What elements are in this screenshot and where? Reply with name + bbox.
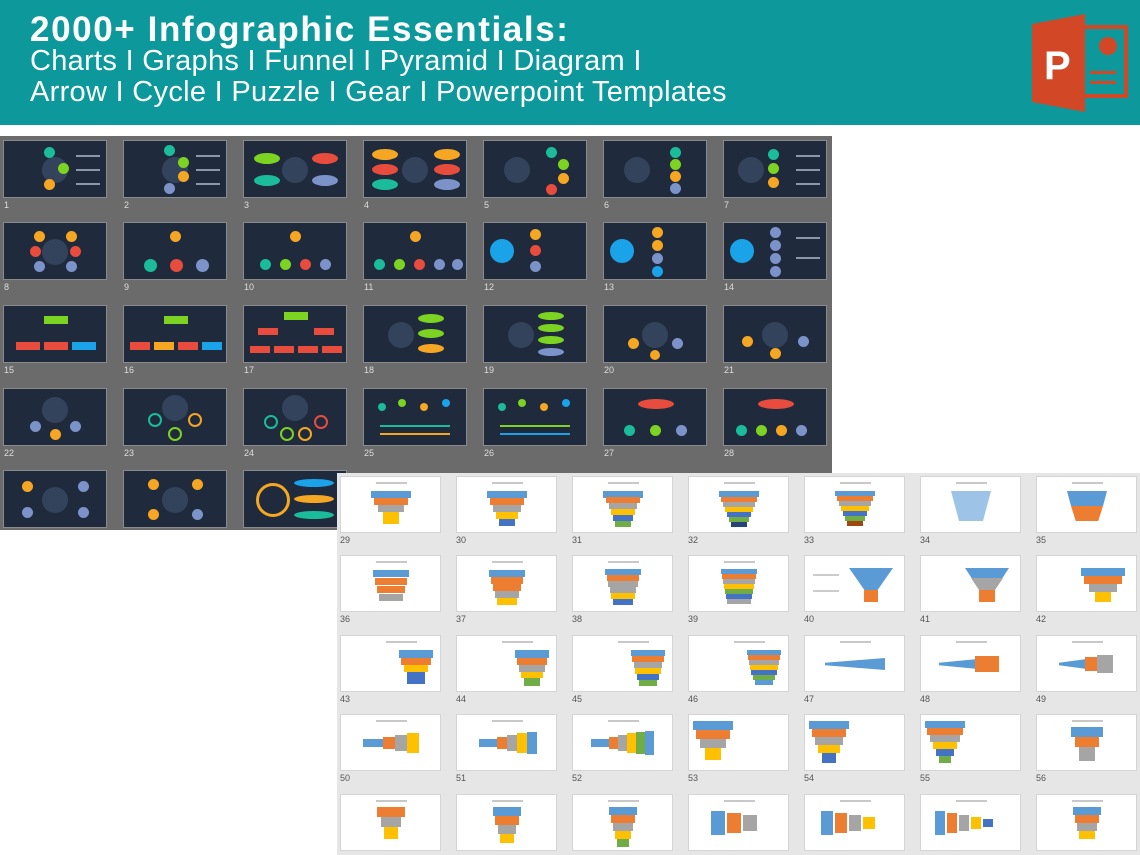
row 3 labels bbox=[4, 365, 734, 375]
panel: light funnel slide grid: 29 bbox=[340, 535, 350, 545]
light thumbnails row 3 bbox=[340, 635, 441, 692]
panel: dark slide grid: 3 bbox=[244, 200, 249, 210]
panel: dark slide grid: 14 bbox=[724, 282, 734, 292]
panel: dark slide grid: 27 bbox=[604, 448, 614, 458]
panel: light funnel slide grid: 54 bbox=[804, 773, 814, 783]
panel: light funnel slide grid: 52 bbox=[572, 773, 582, 783]
panel: light funnel slide grid: 43 bbox=[340, 694, 350, 704]
dark thumbnails row 3 bbox=[3, 305, 107, 363]
title: 2000+ Infographic Essentials: bbox=[30, 10, 570, 49]
row 4 labels bbox=[4, 448, 734, 458]
light thumbnails row 1 bbox=[340, 476, 441, 533]
panel: light funnel slide grid: 33 bbox=[804, 535, 814, 545]
panel: dark slide grid: 15 bbox=[4, 365, 14, 375]
panel: dark slide grid: 28 bbox=[724, 448, 734, 458]
panel: light funnel slide grid: 46 bbox=[688, 694, 698, 704]
icon: powerpoint: P bbox=[1044, 44, 1071, 88]
panel: light funnel slide grid: 50 bbox=[340, 773, 350, 783]
light thumbnails row 2 bbox=[340, 555, 441, 612]
panel: dark slide grid: 23 bbox=[124, 448, 134, 458]
row 1 labels bbox=[340, 535, 1046, 545]
dark thumbnails row 5 bbox=[3, 470, 107, 528]
panel: dark slide grid: 25 bbox=[364, 448, 374, 458]
panel: light funnel slide grid: 37 bbox=[456, 614, 466, 624]
panel: dark slide grid: 20 bbox=[604, 365, 614, 375]
panel: light funnel slide grid: 38 bbox=[572, 614, 582, 624]
panel: light funnel slide grid: 31 bbox=[572, 535, 582, 545]
panel: dark slide grid bbox=[0, 136, 832, 530]
panel: dark slide grid: 10 bbox=[244, 282, 254, 292]
panel: dark slide grid: 26 bbox=[484, 448, 494, 458]
panel: light funnel slide grid: 56 bbox=[1036, 773, 1046, 783]
panel: light funnel slide grid: 53 bbox=[688, 773, 698, 783]
panel: dark slide grid: 13 bbox=[604, 282, 614, 292]
light thumbnails row 4 bbox=[340, 714, 441, 771]
panel: light funnel slide grid: 49 bbox=[1036, 694, 1046, 704]
panel: dark slide grid: 24 bbox=[244, 448, 254, 458]
panel: light funnel slide grid: 55 bbox=[920, 773, 930, 783]
panel: light funnel slide grid: 42 bbox=[1036, 614, 1046, 624]
panel: light funnel slide grid: 41 bbox=[920, 614, 930, 624]
panel: dark slide grid: 8 bbox=[4, 282, 9, 292]
panel: dark slide grid: 5 bbox=[484, 200, 489, 210]
panel: light funnel slide grid bbox=[337, 473, 1140, 855]
panel: dark slide grid: 18 bbox=[364, 365, 374, 375]
panel: light funnel slide grid: 35 bbox=[1036, 535, 1046, 545]
panel: dark slide grid: 1 bbox=[4, 200, 9, 210]
row 2 labels bbox=[4, 282, 734, 292]
subtitle: Charts I Graphs I Funnel I Pyramid I Diagram I bbox=[30, 45, 642, 77]
row 2 labels bbox=[340, 614, 1046, 624]
panel: light funnel slide grid: 48 bbox=[920, 694, 930, 704]
panel: dark slide grid: 12 bbox=[484, 282, 494, 292]
row 1 labels bbox=[4, 200, 729, 210]
panel: light funnel slide grid: 36 bbox=[340, 614, 350, 624]
panel: dark slide grid: 6 bbox=[604, 200, 609, 210]
panel: dark slide grid: 16 bbox=[124, 365, 134, 375]
panel: light funnel slide grid: 51 bbox=[456, 773, 466, 783]
panel: dark slide grid: 21 bbox=[724, 365, 734, 375]
panel: light funnel slide grid: 45 bbox=[572, 694, 582, 704]
dark thumbnails row 1 bbox=[3, 140, 107, 198]
row 3 labels bbox=[340, 694, 1046, 704]
panel: dark slide grid: 7 bbox=[724, 200, 729, 210]
subtitle bbox=[30, 45, 727, 108]
panel: dark slide grid: 9 bbox=[124, 282, 129, 292]
panel: light funnel slide grid: 44 bbox=[456, 694, 466, 704]
panel: light funnel slide grid: 40 bbox=[804, 614, 814, 624]
icon: powerpoint bbox=[1032, 14, 1128, 112]
panel: light funnel slide grid: 47 bbox=[804, 694, 814, 704]
dark thumbnails row 4 bbox=[3, 388, 107, 446]
panel: dark slide grid: 11 bbox=[364, 282, 373, 292]
panel: light funnel slide grid: 34 bbox=[920, 535, 930, 545]
panel: light funnel slide grid: 32 bbox=[688, 535, 698, 545]
panel: dark slide grid: 22 bbox=[4, 448, 14, 458]
light thumbnails row 5 bbox=[340, 794, 441, 851]
panel: light funnel slide grid: 30 bbox=[456, 535, 466, 545]
panel: light funnel slide grid: 39 bbox=[688, 614, 698, 624]
panel: dark slide grid: 17 bbox=[244, 365, 254, 375]
panel: dark slide grid: 2 bbox=[124, 200, 129, 210]
row 4 labels bbox=[340, 773, 1046, 783]
panel: dark slide grid: 19 bbox=[484, 365, 494, 375]
header band bbox=[0, 0, 1140, 125]
dark thumbnails row 2 bbox=[3, 222, 107, 280]
subtitle: Arrow I Cycle I Puzzle I Gear I Powerpoint Templates bbox=[30, 76, 727, 108]
panel: dark slide grid: 4 bbox=[364, 200, 369, 210]
